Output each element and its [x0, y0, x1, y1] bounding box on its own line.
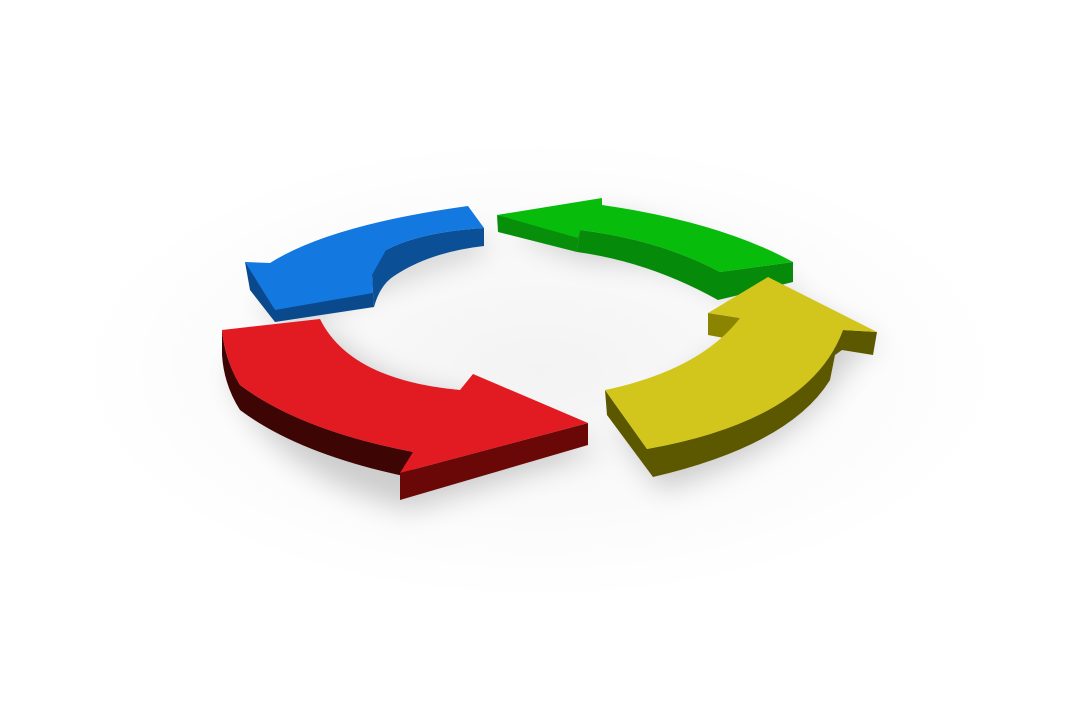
arrow: green — [497, 198, 793, 300]
arrow: red — [222, 319, 588, 500]
arrow: yellow — [605, 277, 877, 477]
arrow: blue — [245, 206, 484, 322]
shadows — [230, 215, 880, 510]
